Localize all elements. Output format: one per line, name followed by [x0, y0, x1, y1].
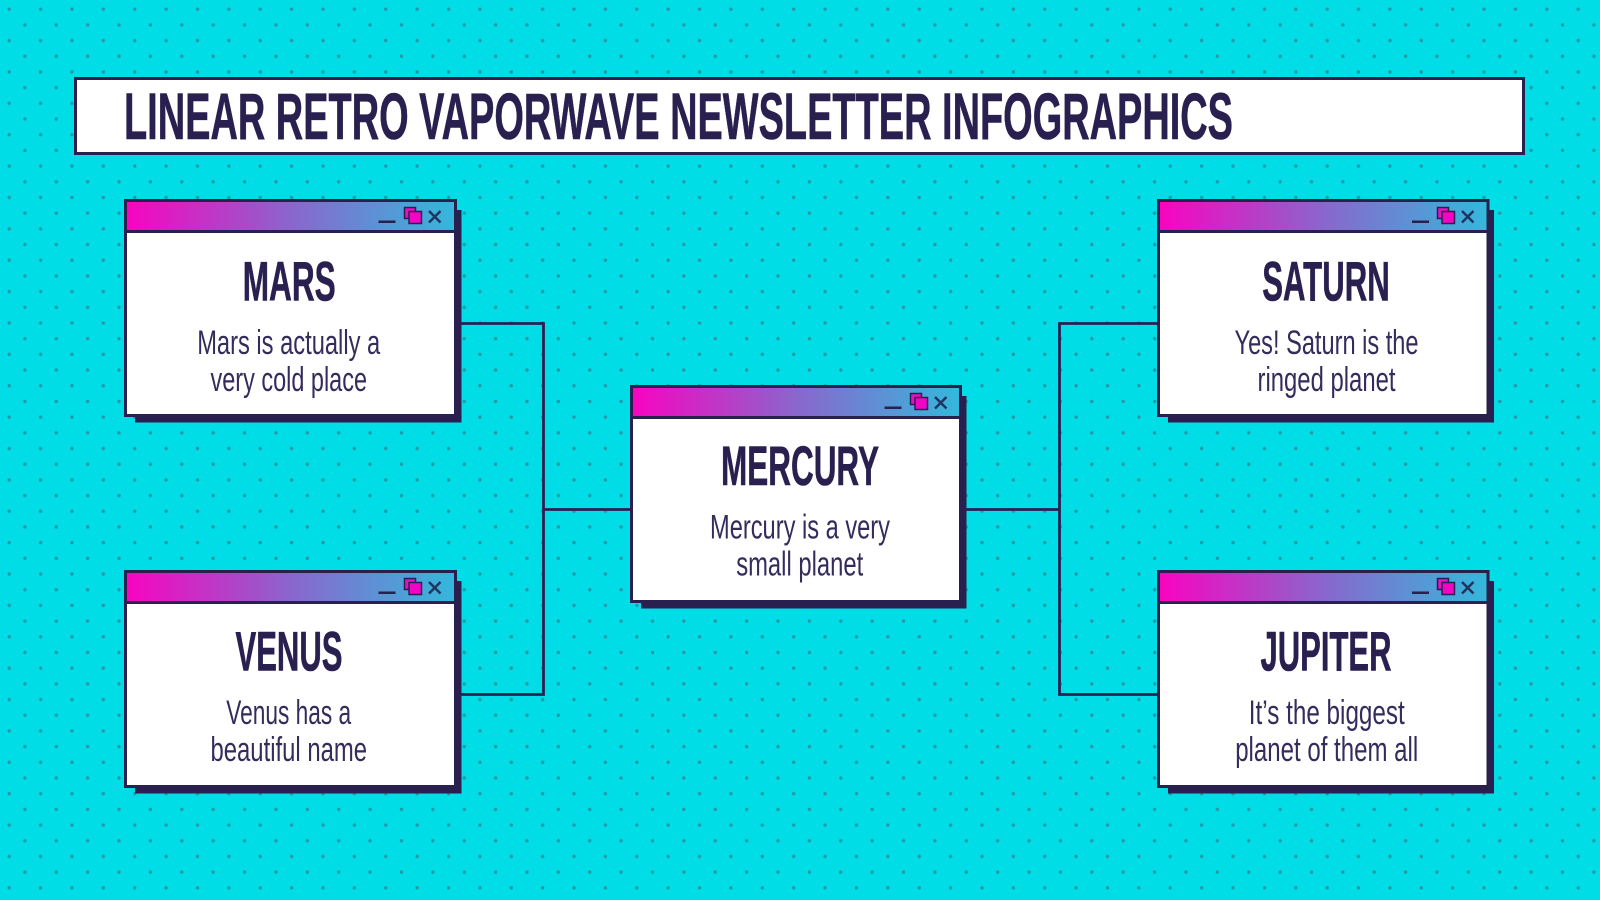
description: venus: beautiful name [210, 731, 367, 769]
window title bar [633, 388, 959, 417]
description: jupiter [1235, 694, 1418, 769]
description: jupiter: It’s the biggest [1249, 694, 1405, 732]
window title bar [127, 573, 454, 602]
heading: jupiter: JUPITER [1260, 620, 1392, 682]
description: mercury: Mercury is a very [710, 508, 890, 546]
window controls [1412, 578, 1474, 594]
description: saturn [1234, 324, 1418, 399]
panel: jupiter [1158, 572, 1494, 794]
description: saturn: ringed planet [1258, 361, 1396, 399]
title banner [76, 78, 1524, 154]
heading: venus: VENUS [236, 620, 342, 682]
window controls [378, 208, 440, 224]
window title bar [127, 202, 454, 231]
window title bar [1160, 573, 1486, 602]
panel: mars [126, 200, 462, 422]
panel: saturn [1158, 200, 1494, 422]
description: jupiter: planet of them all [1235, 731, 1418, 769]
window title bar [1160, 202, 1486, 231]
description: mars [197, 324, 380, 399]
window controls [884, 394, 946, 410]
description: mercury [710, 508, 890, 584]
heading: mercury: MERCURY [721, 434, 879, 497]
window controls [378, 578, 440, 594]
description: mars: Mars is actually a [197, 324, 380, 362]
description: venus: Venus has a [226, 694, 351, 732]
description: venus [210, 694, 367, 769]
connector lines [460, 324, 1160, 694]
description: saturn: Yes! Saturn is the [1234, 324, 1418, 362]
description: mars: very cold place [210, 361, 367, 399]
description: mercury: small planet [736, 546, 864, 584]
panel: mercury [632, 386, 966, 608]
window controls [1412, 208, 1474, 224]
heading: mars: MARS [243, 250, 336, 312]
panel: venus [126, 572, 462, 794]
heading: saturn: SATURN [1262, 250, 1390, 312]
